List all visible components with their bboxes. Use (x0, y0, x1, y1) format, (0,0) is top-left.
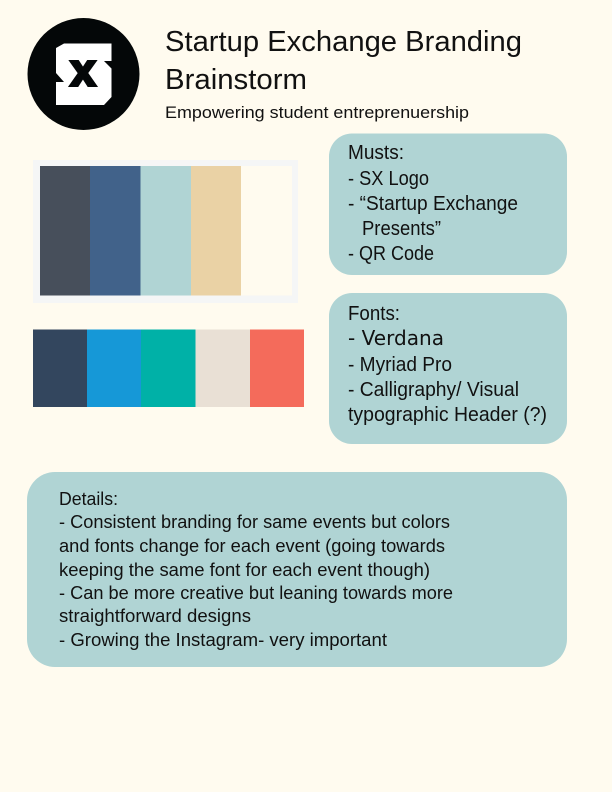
panel: details: Details: (59, 489, 118, 509)
panel: musts: - SX Logo (348, 168, 429, 190)
panel: fonts: - Verdana (348, 326, 444, 350)
title (165, 26, 522, 96)
icon: SX logo (28, 18, 140, 130)
panel: details: - Growing the Instagram- very important (59, 630, 387, 650)
panel: details: - Consistent branding for same events but colors (59, 512, 450, 532)
panel: musts (329, 134, 567, 275)
panel: details: and fonts change for each event (going towards (59, 536, 445, 556)
colour palette 2 (33, 330, 304, 407)
panel: fonts (329, 293, 567, 444)
panel: details: straightforward designs (59, 606, 251, 626)
panel: musts: - QR Code (348, 243, 434, 265)
panel: fonts: Fonts: (348, 303, 400, 325)
panel: musts: Musts: (348, 142, 404, 164)
title: Startup Exchange Branding (165, 26, 522, 58)
panel: fonts: typographic Header (?) (348, 404, 547, 426)
colour palette 1 (33, 160, 298, 303)
panel: details: keeping the same font for each event though) (59, 560, 430, 580)
panel: fonts: - Myriad Pro (348, 354, 452, 376)
icon: SX logo: x (70, 44, 96, 96)
panel: musts: Presents” (362, 218, 441, 240)
panel: details (27, 472, 567, 667)
panel: fonts: - Calligraphy/ Visual (348, 379, 519, 401)
title: Brainstorm (165, 64, 307, 96)
panel: musts: - “Startup Exchange (348, 193, 518, 215)
panel: details: - Can be more creative but leaning towards more (59, 583, 453, 603)
subtitle: Empowering student entreprenuership (165, 103, 469, 122)
